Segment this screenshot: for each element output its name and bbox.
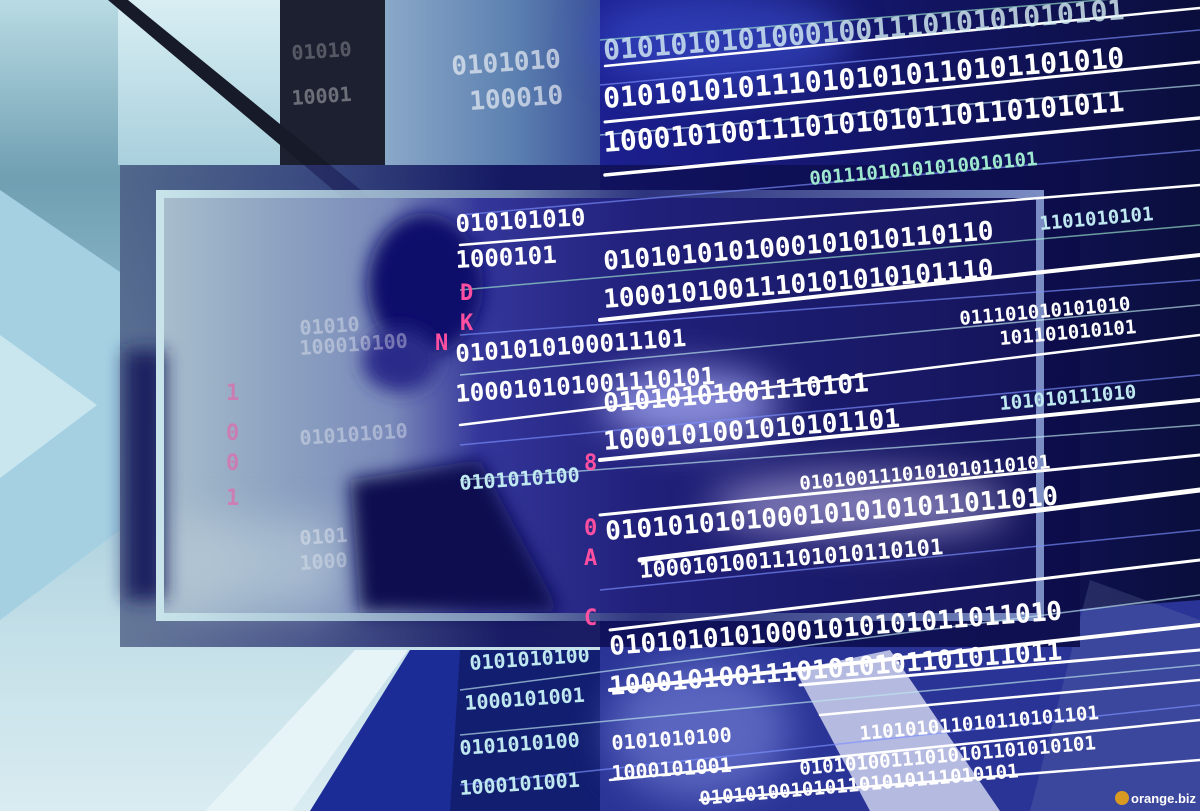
binary code: main white rows: 0101010101000101010110110 — [602, 216, 995, 277]
binary code: main white rows: 10001010011101010110101 — [639, 535, 944, 584]
binary code: magenta vertical glyphs: 0 — [226, 421, 239, 446]
lighter lower-left mist — [170, 520, 340, 605]
binary code: smaller right rows: 1101010101 — [1039, 203, 1154, 235]
binary code: faded rows on the left and lower centre: 0101 — [299, 523, 348, 550]
background: dark blue right field — [600, 0, 1200, 811]
binary code: main white rows: 01010101010001010101011011010 — [604, 481, 1059, 547]
binary code: magenta vertical glyphs: 0 — [226, 451, 239, 476]
binary code: magenta vertical glyphs: N — [435, 331, 448, 356]
arrow: upper chevron on left edge — [0, 190, 120, 620]
binary code: main white rows: 100010101001110101 — [454, 362, 716, 408]
background: pale triangle lower left — [205, 650, 408, 811]
panel: translucent dark banner — [120, 165, 1080, 647]
binary code: main white rows: 01010101010001010101011011010 — [608, 596, 1063, 662]
binary code: faded rows on the left and lower centre: 0101010100 — [459, 463, 580, 495]
binary code: faded rows on the left and lower centre: 1000 — [299, 548, 348, 575]
binary code: main white rows: 010101010 — [455, 203, 586, 238]
binary code: smaller right rows: 0101001110101010110101 — [799, 451, 1051, 495]
binary code: magenta vertical glyphs: 0 — [584, 516, 597, 541]
binary code: main white rows: 0101010100011101 — [454, 324, 687, 368]
binary code: faded rows on the left and lower centre — [291, 37, 732, 800]
binary code: smaller right rows: 01010100111010101101010101 — [799, 732, 1097, 780]
binary code: faded rows on the left and lower centre: 1000101001 — [611, 753, 732, 785]
binary code: smaller right rows: 00111010101010010101 — [809, 148, 1038, 190]
misty violet patch — [710, 473, 1010, 537]
binary code: magenta vertical glyphs: A — [584, 546, 597, 571]
binary code: magenta vertical glyphs: 1 — [226, 486, 239, 511]
binary code: faded rows on the left and lower centre: 0101010 — [450, 44, 562, 82]
binary code: faded rows on the left and lower centre: 0101010100 — [469, 643, 590, 675]
binary code: magenta vertical glyphs: D — [460, 281, 473, 306]
binary code: faded rows on the left and lower centre: 1000101001 — [464, 683, 585, 715]
background: misty upper centre — [385, 0, 605, 165]
binary code: main white rows: 1000101001010101101 — [602, 404, 901, 457]
blurred dark band left — [125, 350, 165, 600]
binary code: main white rows: 01010101001110101 — [602, 368, 870, 419]
background: lower centre navy — [310, 650, 620, 811]
binary code: main white rows: 1000101001110101010101110 — [602, 254, 995, 315]
binary code: magenta vertical glyphs: K — [460, 311, 474, 336]
binary code: magenta vertical glyphs: 1 — [226, 381, 239, 406]
diagonal dark line — [108, 0, 400, 236]
background: light upper-left pane — [118, 0, 420, 165]
misty bright patch — [600, 370, 780, 440]
binary code: main white rows: 10001010011101010101101011011 — [608, 636, 1063, 702]
binary code: main white rows: 1000101 — [455, 241, 557, 274]
blurred dark silhouette neck — [362, 328, 438, 392]
binary code: smaller right rows: 0101010010101101010111010101 — [699, 760, 1020, 810]
background: pale grey lower right corner — [1030, 580, 1200, 811]
binary code: magenta vertical glyphs: 8 — [584, 451, 597, 476]
streaks: thin tinted lines — [460, 0, 1200, 785]
binary code: faded rows on the left and lower centre: 100010100 — [299, 328, 408, 360]
background: lower right blue block — [600, 600, 1200, 811]
background: lavender glow lower centre — [610, 660, 790, 800]
watermark: logo: orange.biz — [1131, 791, 1197, 806]
binary code: smaller right rows — [699, 148, 1154, 810]
background: dark top column — [280, 0, 385, 165]
streaks: white lines across the right — [460, 8, 1200, 800]
binary code: faded rows on the left and lower centre: 01010 — [291, 37, 352, 65]
blurred dark silhouette upper — [367, 213, 483, 357]
binary code: faded rows on the left and lower centre: 1000101001 — [459, 768, 580, 800]
background: lower centre dark overlay — [450, 650, 620, 811]
binary code: main white rows: 1000101001110101010110110101011 — [602, 85, 1126, 159]
binary code: faded rows on the left and lower centre: 010101010 — [299, 418, 408, 450]
binary code: faded rows on the left and lower centre: 0101010100 — [459, 728, 580, 760]
binary code: faded rows on the left and lower centre: 100010 — [468, 81, 564, 117]
blurred dark silhouette lower — [350, 460, 560, 612]
binary code: faded rows on the left and lower centre: 01010 — [299, 312, 360, 340]
background: pale diagonal lower right — [795, 650, 1000, 811]
binary code: magenta vertical glyphs — [226, 281, 597, 631]
binary code: magenta vertical glyphs: C — [584, 606, 597, 631]
panel inner photographic fill — [163, 198, 1040, 613]
binary code: main white rows — [454, 0, 1126, 702]
binary code: smaller right rows: 101010111010 — [999, 381, 1137, 415]
binary code: faded rows on the left and lower centre: 10001 — [291, 82, 352, 110]
binary code: smaller right rows: 011101010101010 — [959, 293, 1131, 330]
binary code: smaller right rows: 101101010101 — [999, 316, 1137, 350]
binary code: main white rows: 0101010101110101010110101101010 — [602, 41, 1126, 115]
arrow: inner chevron on left edge — [0, 335, 97, 478]
binary code: smaller right rows: 110101011010110101101 — [859, 702, 1100, 745]
background: bright glow top right — [590, 0, 850, 90]
binary code: faded rows on the left and lower centre: 0101010100 — [611, 723, 732, 755]
frame outline — [160, 194, 1040, 617]
